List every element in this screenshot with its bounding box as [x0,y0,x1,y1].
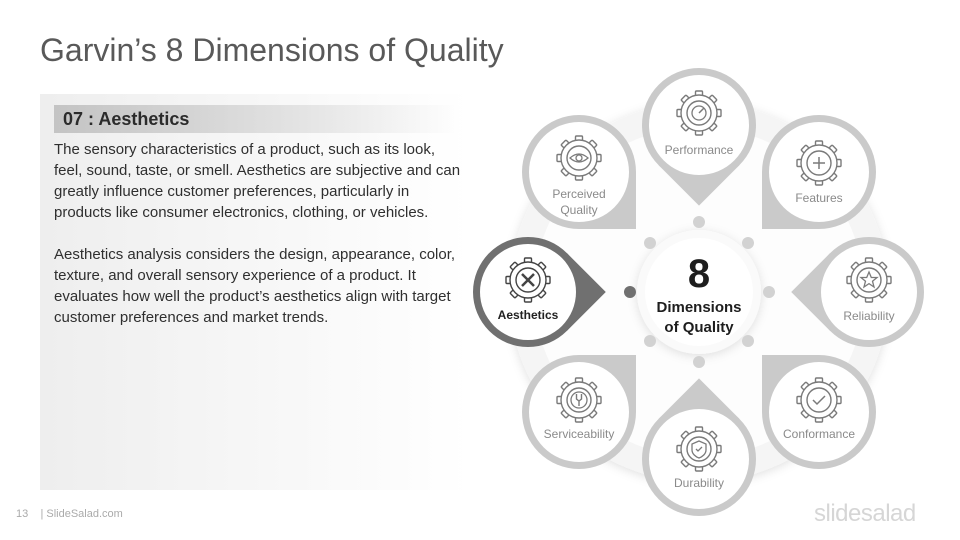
node: perceived quality [522,115,636,229]
node: aesthetics (active): Aesthetics [498,308,559,322]
footer: 13 | SlideSalad.com [16,508,123,520]
node: durability: Durability [674,476,724,490]
body text: Aesthetics analysis considers the design, appearance, color, texture, and overall sensory experience of a product. It evaluates how well the product’s aesthetics align with target customer preferences and market trends. [54,246,455,326]
node: serviceability [522,355,636,469]
heading text: 07 : Aesthetics [63,109,189,129]
node: serviceability: Serviceability [544,427,614,441]
node: performance [618,44,780,206]
connector dots [624,216,775,368]
center circle [637,230,761,354]
heading bar [54,105,460,133]
center circle: 8 [688,252,710,296]
logo: slidesalad [814,500,916,527]
body text [54,141,460,326]
node: durability [618,378,780,540]
body text: The sensory characteristics of a product, such as its look, feel, sound, taste, or smell. Aesthetics are subjective and can greatly influence customer preferences, particularly in products like consumer electronics, clothing, or vehicles. [54,141,460,221]
node: aesthetics (active) [450,214,606,370]
background ring [509,102,889,482]
node: features: Features [795,191,843,205]
node: reliability: Reliability [843,309,895,323]
panel: description [40,94,470,490]
node: conformance: Conformance [783,427,855,441]
title: Garvin’s 8 Dimensions of Quality [40,32,504,68]
node: perceived quality: Quality [560,203,598,217]
node: reliability [791,214,947,370]
node: performance: Performance [665,143,734,157]
node: features [762,115,876,229]
center circle: of Quality [664,319,734,336]
node: conformance [762,355,876,469]
center circle: Dimensions [656,299,742,316]
node: perceived quality: Perceived [552,187,606,201]
